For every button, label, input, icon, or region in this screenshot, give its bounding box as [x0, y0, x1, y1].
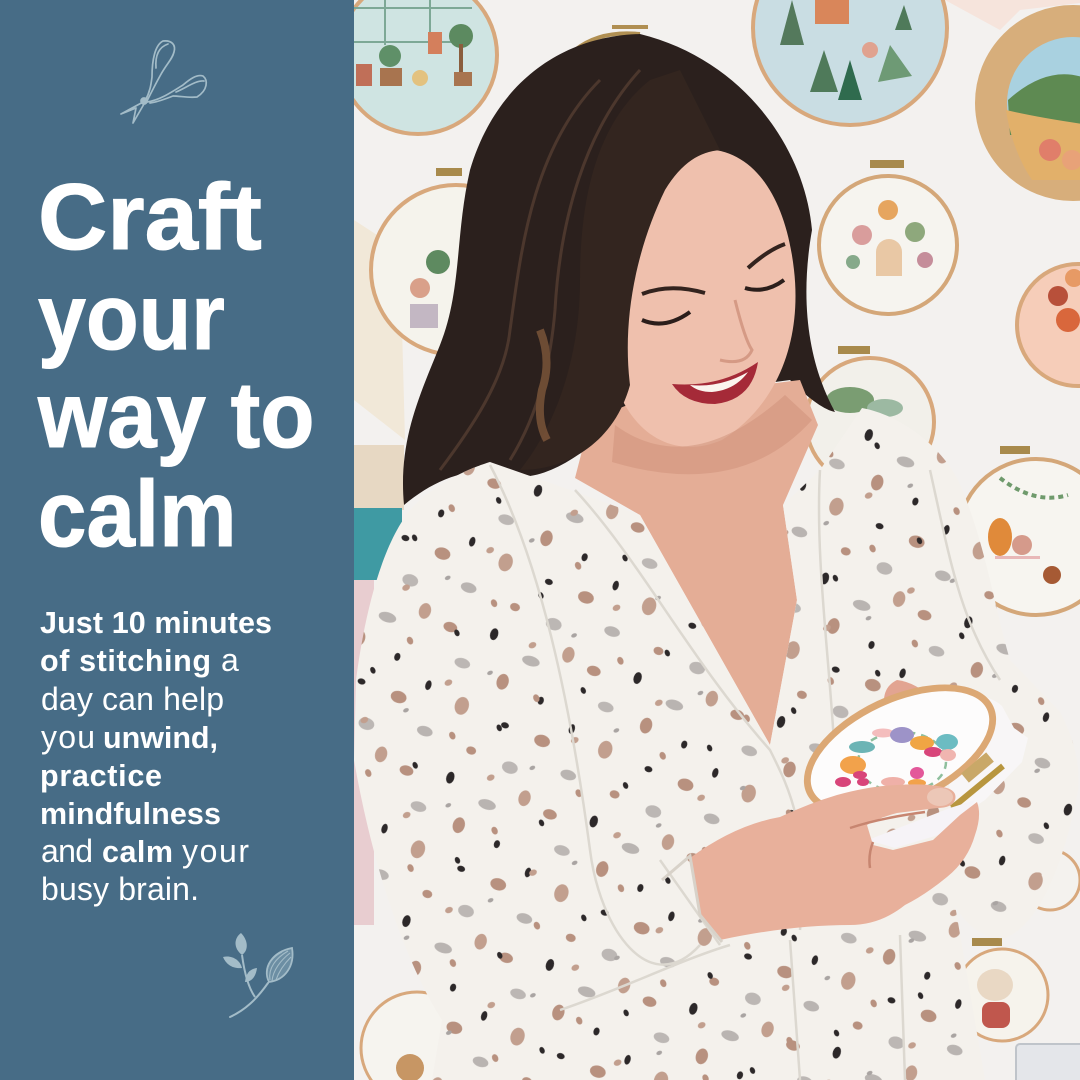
eyebrows: [642, 244, 785, 294]
body text: mindfulness: [40, 797, 221, 831]
icon: leaf sprig: [223, 933, 293, 1017]
mouth: [672, 362, 758, 404]
body text: unwind,: [103, 721, 218, 755]
embroidery hoop: autumn scene: [958, 446, 1080, 615]
hair back: [403, 34, 835, 505]
teeth: [690, 372, 748, 392]
upper thumb: [884, 680, 935, 722]
body text: a: [221, 642, 239, 678]
finger crease: [850, 812, 925, 868]
hand and fingers: [690, 784, 979, 940]
flower wreath: [835, 727, 958, 792]
wall background: [354, 0, 1080, 1080]
body text: calm: [102, 835, 173, 869]
body text: practice: [40, 759, 162, 793]
neck shadow: [612, 395, 812, 474]
pale corner shapes on the wall: [354, 0, 1080, 440]
embroidery hoop: left flower pot: [371, 168, 541, 355]
heading: way to: [37, 363, 315, 468]
closed eyes: [642, 280, 784, 324]
embroidery hoop: hills: [806, 346, 934, 486]
hair highlight strands: [440, 70, 640, 470]
sleeve cuff edge: [662, 856, 722, 942]
embroidery hoop: floral rainbow: [819, 160, 957, 314]
embroidery hoop: partly hidden right: [1020, 850, 1080, 910]
embroidery hoop: peach flowers: [1017, 264, 1080, 386]
hoop ring: [784, 658, 1016, 842]
blouse folds: [490, 465, 1000, 1080]
heading: calm: [38, 462, 237, 567]
body text: day can help: [41, 681, 224, 717]
body text: Just 10 minutes: [40, 606, 272, 640]
body text: [40, 606, 272, 907]
body text: of stitching: [40, 644, 211, 678]
body text: and: [41, 833, 93, 869]
body text: you: [41, 719, 95, 755]
heading: Craft: [38, 165, 262, 270]
brass screw and plate: [952, 757, 1003, 808]
fingernail: [927, 788, 953, 806]
hair strands over face: [520, 70, 720, 470]
embroidery hoop in hand: [662, 658, 1028, 942]
wire basket: [1016, 1044, 1080, 1080]
body text: your: [182, 833, 249, 869]
face: [617, 149, 796, 447]
heading: your: [38, 265, 225, 370]
embroidery hoop: greenhouse: [339, 0, 497, 134]
embroidery hoop: mouse: [956, 938, 1048, 1041]
photo: woman embroidering in front of a hoop wall: [354, 0, 1080, 1080]
embroidery hoop: bottom left: [361, 992, 473, 1080]
body text: busy brain.: [41, 871, 199, 907]
embroidery hoop: landscape in wide wood frame: [991, 21, 1080, 185]
embroidery hoop: forest: [753, 0, 947, 125]
hoop brass hook behind hair: [575, 27, 648, 50]
fabric under fingers: [868, 800, 975, 848]
white fabric behind hoop: [945, 693, 1028, 820]
hoop fabric: [793, 667, 1007, 833]
panel: blue side panel: [0, 0, 354, 1080]
blouse: [354, 408, 1078, 1080]
nose: [720, 300, 752, 362]
woven wall hanging: [354, 445, 404, 925]
icon: scissors: [121, 41, 206, 123]
heading: [37, 165, 315, 567]
facial features: [642, 244, 785, 404]
neck and chest: [575, 380, 818, 745]
